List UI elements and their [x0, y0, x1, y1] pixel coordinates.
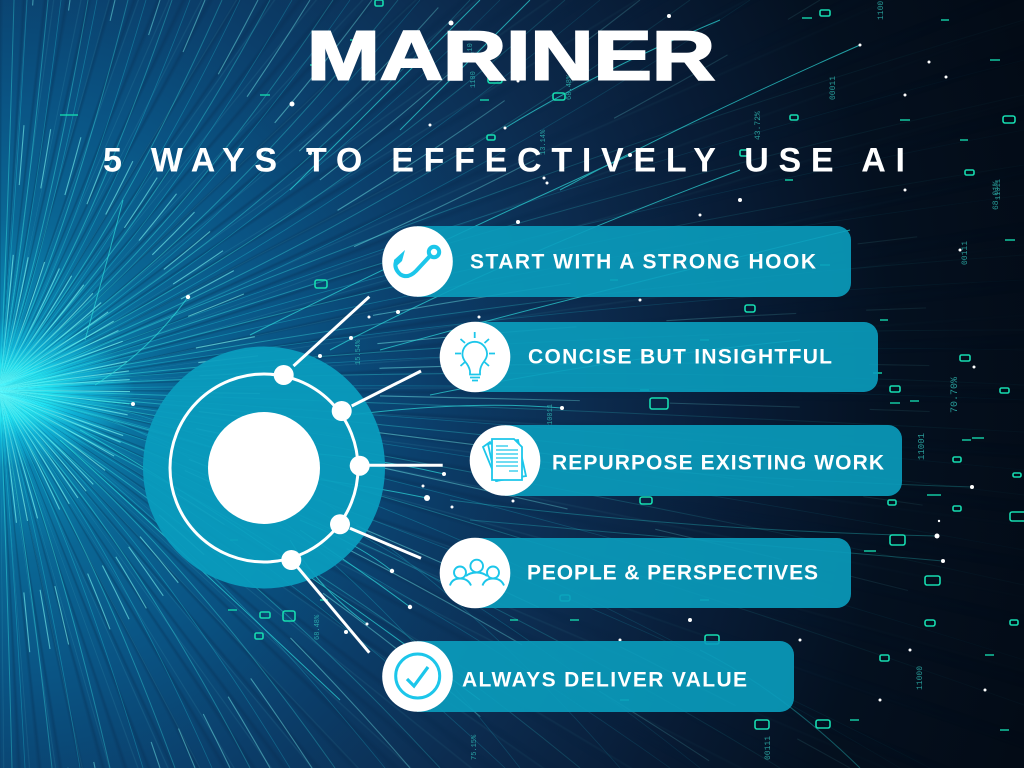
tiny data labels: 10011: [547, 404, 555, 425]
floating particles: [131, 14, 986, 702]
item 3: repurpose existing work: [470, 425, 902, 496]
tiny data labels: 43.72%: [754, 111, 763, 140]
icon: check mark: [396, 654, 440, 698]
tiny data labels: 70.70%: [950, 377, 961, 413]
tiny data labels: 1110: [467, 43, 475, 60]
tiny data labels: 68.48%: [314, 614, 322, 640]
label: REPURPOSE EXISTING WORK: [552, 452, 884, 474]
label: PEOPLE & PERSPECTIVES: [527, 562, 818, 584]
title: 5 WAYS TO EFFECTIVELY USE AI: [103, 142, 905, 180]
hub centre circle: [208, 412, 320, 524]
hub diagram: [143, 297, 443, 653]
tiny data labels: 1100: [470, 71, 478, 88]
tiny data labels: 00011: [829, 76, 838, 100]
hub ring: [170, 374, 358, 562]
tiny data labels: 11000: [916, 666, 925, 690]
item 5: always deliver value: [382, 641, 794, 712]
item 1: start with a strong hook: [382, 226, 851, 297]
item 2: concise but insightful: [440, 322, 878, 392]
binary glyph rectangles: [255, 0, 1024, 729]
icon: light bulb: [455, 332, 495, 380]
tiny data labels: 00111: [961, 241, 970, 265]
item 4: people and perspectives: [440, 538, 851, 608]
label: START WITH A STRONG HOOK: [470, 250, 816, 274]
tiny data labels: 13.14%: [540, 129, 548, 155]
logo: MARINER: MARINER: [307, 16, 715, 94]
tiny data labels: [314, 1, 1003, 760]
icon: documents: [483, 439, 526, 481]
hub disc: [143, 346, 385, 588]
tiny data labels: 68.48%: [566, 74, 574, 100]
label: ALWAYS DELIVER VALUE: [462, 668, 747, 692]
tiny data labels: 11011: [995, 179, 1003, 200]
tiny data labels: 1100: [877, 1, 886, 20]
label: CONCISE BUT INSIGHTFUL: [528, 346, 832, 368]
icon: hook: [394, 247, 439, 276]
tiny data labels: 75.15%: [471, 734, 479, 760]
tiny data labels: 11001: [917, 433, 927, 460]
icon: people: [450, 560, 504, 586]
tiny data labels: 68.01%: [992, 181, 1001, 210]
connector lines: [294, 297, 443, 653]
tiny data labels: 00111: [764, 736, 773, 760]
hub nodes: [274, 365, 370, 570]
tiny data labels: 15.54%: [355, 339, 363, 365]
